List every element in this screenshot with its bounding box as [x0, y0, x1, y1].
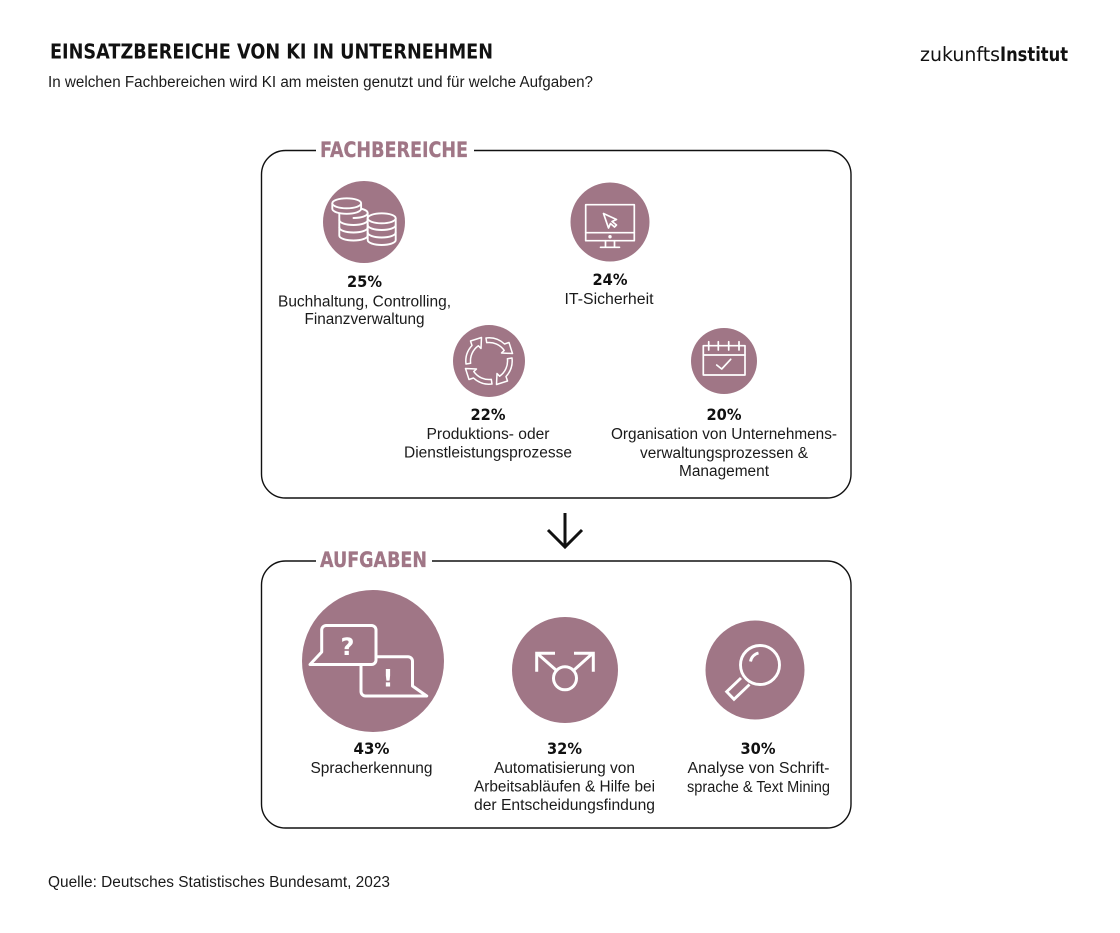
item: Automatisierung	[474, 617, 655, 814]
item: Automatisierung: Arbeitsabläufen & Hilfe bei	[474, 778, 655, 796]
item: Analyse: 30%	[740, 739, 776, 758]
panel: Aufgaben	[262, 548, 851, 828]
item: Organisation: 20%	[706, 405, 742, 424]
arrow	[548, 513, 582, 547]
item: Produktion: Dienstleistungsprozesse	[404, 444, 572, 462]
icon: speech bubbles: !	[383, 664, 393, 692]
item: IT-Sicherheit: IT-Sicherheit	[564, 291, 654, 308]
item: IT-Sicherheit: 24%	[592, 270, 628, 289]
item: Analyse	[687, 620, 830, 796]
item: Automatisierung: 32%	[547, 739, 582, 758]
panel: Fachbereiche	[262, 138, 851, 498]
heading: Fachbereiche: FACHBEREICHE	[320, 138, 468, 162]
icon: speech bubbles: ?	[341, 633, 354, 661]
logo: zukunfts	[920, 43, 1000, 66]
icon: coins	[323, 181, 405, 263]
item: Produktion	[404, 325, 572, 462]
source: Quelle: Deutsches Statistisches Bundesamt, 2023	[48, 874, 390, 891]
item: IT-Sicherheit	[564, 182, 654, 308]
item: Buchhaltung: Buchhaltung, Controlling,	[278, 294, 451, 310]
item: Spracherkennung: 43%	[354, 739, 390, 758]
item: Analyse: sprache & Text Mining	[687, 779, 830, 796]
item: Spracherkennung: Spracherkennung	[310, 760, 432, 777]
icon: magnifier	[706, 620, 804, 720]
item: Organisation: verwaltungsprozessen &	[640, 445, 809, 462]
item: Automatisierung: Automatisierung von	[494, 760, 635, 777]
icon: cycle arrows	[453, 325, 525, 397]
logo: Institut	[1000, 43, 1068, 66]
item: Buchhaltung	[278, 181, 451, 328]
item: Produktion: Produktions- oder	[426, 426, 550, 443]
icon: diverging arrows	[512, 617, 618, 723]
item: Buchhaltung: Finanzverwaltung	[304, 311, 424, 328]
item: Organisation: Organisation von Unternehmens-	[611, 426, 837, 443]
item: Spracherkennung	[302, 590, 444, 777]
icon: monitor	[570, 182, 650, 262]
icon: calendar	[691, 328, 757, 394]
item: Buchhaltung: 25%	[347, 272, 382, 291]
item: Analyse: Analyse von Schrift-	[688, 760, 830, 777]
item: Produktion: 22%	[470, 405, 506, 424]
item: Organisation	[611, 328, 837, 480]
heading: Aufgaben: AUFGABEN	[320, 548, 427, 572]
subtitle: In welchen Fachbereichen wird KI am meisten genutzt und für welche Aufgaben?	[48, 74, 593, 91]
item: Automatisierung: der Entscheidungsfindung	[474, 797, 655, 814]
title: EINSATZBEREICHE VON KI IN UNTERNEHMEN	[50, 40, 493, 64]
icon: speech bubbles	[302, 590, 444, 732]
item: Organisation: Management	[679, 463, 770, 480]
